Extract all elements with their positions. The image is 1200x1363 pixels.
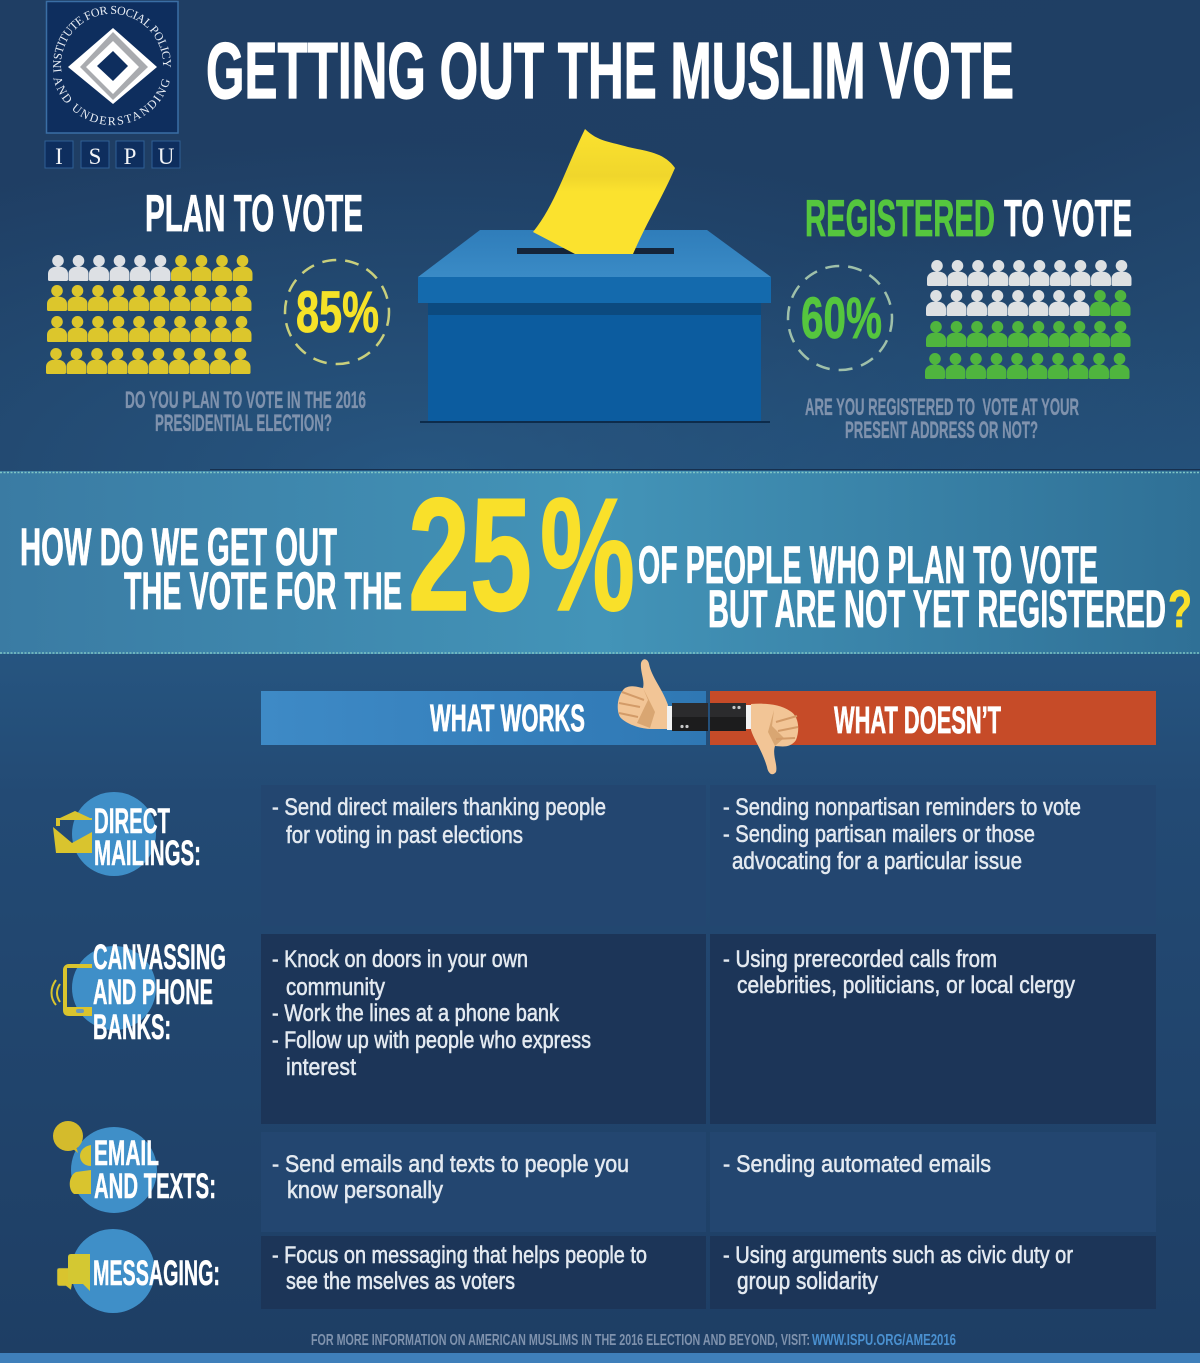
question: registered: PRESENT ADDRESS OR NOT? [845,417,1038,444]
logo: ISPU [44,0,180,169]
what doesn't: direct mailings: advocating for a particular issue [732,848,1022,875]
people chart: registered [925,260,1132,379]
what works: direct mailings: for voting in past elections [286,822,523,849]
what works: email: - Send emails and texts to people you [272,1151,629,1178]
what doesn't: messaging: - Using arguments such as civic duty or [723,1242,1073,1269]
row: direct mailings [53,785,1156,926]
label [94,1134,216,1206]
box lid [418,230,771,277]
label [94,802,201,873]
what doesn't: direct mailings: - Sending nonpartisan reminders to vote [723,794,1081,821]
icon: envelope [53,792,156,876]
ballot box [418,129,771,423]
header: what doesn't [710,691,1156,745]
label: CANVASSING [93,938,226,977]
registered to vote heading: REGISTERED [805,190,995,248]
question: plan to vote: PRESIDENTIAL ELECTION? [155,410,332,437]
icon: thumbs up [618,659,708,731]
what works: canvassing: interest [286,1054,356,1081]
logo circular text: INSTITUTE FOR SOCIAL POLICY [53,6,171,72]
bottom bar [0,1353,1200,1363]
logo letters: P [124,144,136,169]
what doesn't: canvassing: - Using prerecorded calls from [723,946,997,973]
row: messaging [57,1229,1156,1313]
what works: canvassing: - Follow up with people who express [272,1027,591,1054]
icon: thumbs down [710,703,798,774]
icon: phone [52,946,156,1030]
what works: direct mailings [261,785,706,926]
what works: canvassing [261,934,706,1124]
logo letters: U [158,144,175,169]
what works: email [261,1132,706,1232]
row: email and texts [53,1121,1156,1232]
band text right: ? [1168,580,1192,639]
box body [428,303,761,422]
label: MESSAGING: [93,1254,220,1293]
icon: chat bubbles [57,1229,155,1313]
band text left [20,518,402,621]
25 percent figure: 25 [408,465,532,645]
ballot paper [533,129,675,254]
what works: email: know personally [287,1177,443,1204]
slot [517,248,674,254]
what works: canvassing: - Work the lines at a phone bank [272,1000,560,1027]
what doesn't: canvassing: celebrities, politicians, or local clergy [737,972,1075,999]
what works: messaging [261,1236,706,1309]
label: AND PHONE [93,973,213,1012]
band text right [638,536,1192,639]
band text left: HOW DO WE GET OUT [20,518,337,577]
label: DIRECT [94,802,170,841]
plan to vote heading: PLAN TO VOTE [145,185,363,243]
question: plan to vote: DO YOU PLAN TO VOTE IN THE 2016 [125,387,366,414]
label: BANKS: [93,1008,171,1047]
logo circular text [53,6,171,126]
logo circular text: AND UNDERSTANDING [53,78,170,126]
question: plan to vote [125,387,366,437]
footer source line: WWW.ISPU.ORG/AME2016 [812,1332,956,1349]
what doesn't: email [710,1132,1156,1232]
label: AND TEXTS: [94,1167,216,1206]
stat: 85% [285,260,389,364]
what doesn't: messaging [710,1236,1156,1309]
stat: 85%: 85% [296,280,379,345]
band text left: THE VOTE FOR THE [124,562,402,621]
logo letters: I [55,144,63,169]
what doesn't: messaging: group solidarity [737,1268,878,1295]
header: what doesn't: WHAT DOESN’T [834,700,1001,742]
label: MAILINGS: [94,834,201,873]
question: registered [805,394,1079,444]
what works: canvassing: community [286,974,385,1001]
label: EMAIL [94,1134,159,1173]
what works: direct mailings: - Send direct mailers thanking people [272,794,606,821]
what works: messaging: see the mselves as voters [286,1268,515,1295]
what doesn't: direct mailings: - Sending partisan mailers or those [723,821,1035,848]
footer source line: FOR MORE INFORMATION ON AMERICAN MUSLIMS IN THE 2016 ELECTION AND BEYOND, VISIT: [311,1332,810,1349]
row: canvassing and phone banks [52,934,1156,1124]
band: 25% question [0,465,1200,654]
label [93,938,226,1047]
what works: canvassing: - Knock on doors in your own [272,946,528,973]
header: what works: WHAT WORKS [430,698,585,740]
what doesn't: canvassing [710,934,1156,1124]
logo letters: S [89,144,101,169]
logo diamond mark [68,28,157,104]
what doesn't: email: - Sending automated emails [723,1151,991,1178]
icon: speech bubbles [53,1121,157,1213]
people chart: plan to vote [46,255,252,374]
25 percent figure: % [540,465,635,645]
stat: 60% [788,266,892,370]
header: what works [261,691,706,745]
logo letters [45,141,180,169]
what works: messaging: - Focus on messaging that helps people to [272,1242,647,1269]
what doesn't: direct mailings [710,785,1156,926]
stat: 60%: 60% [801,286,882,351]
